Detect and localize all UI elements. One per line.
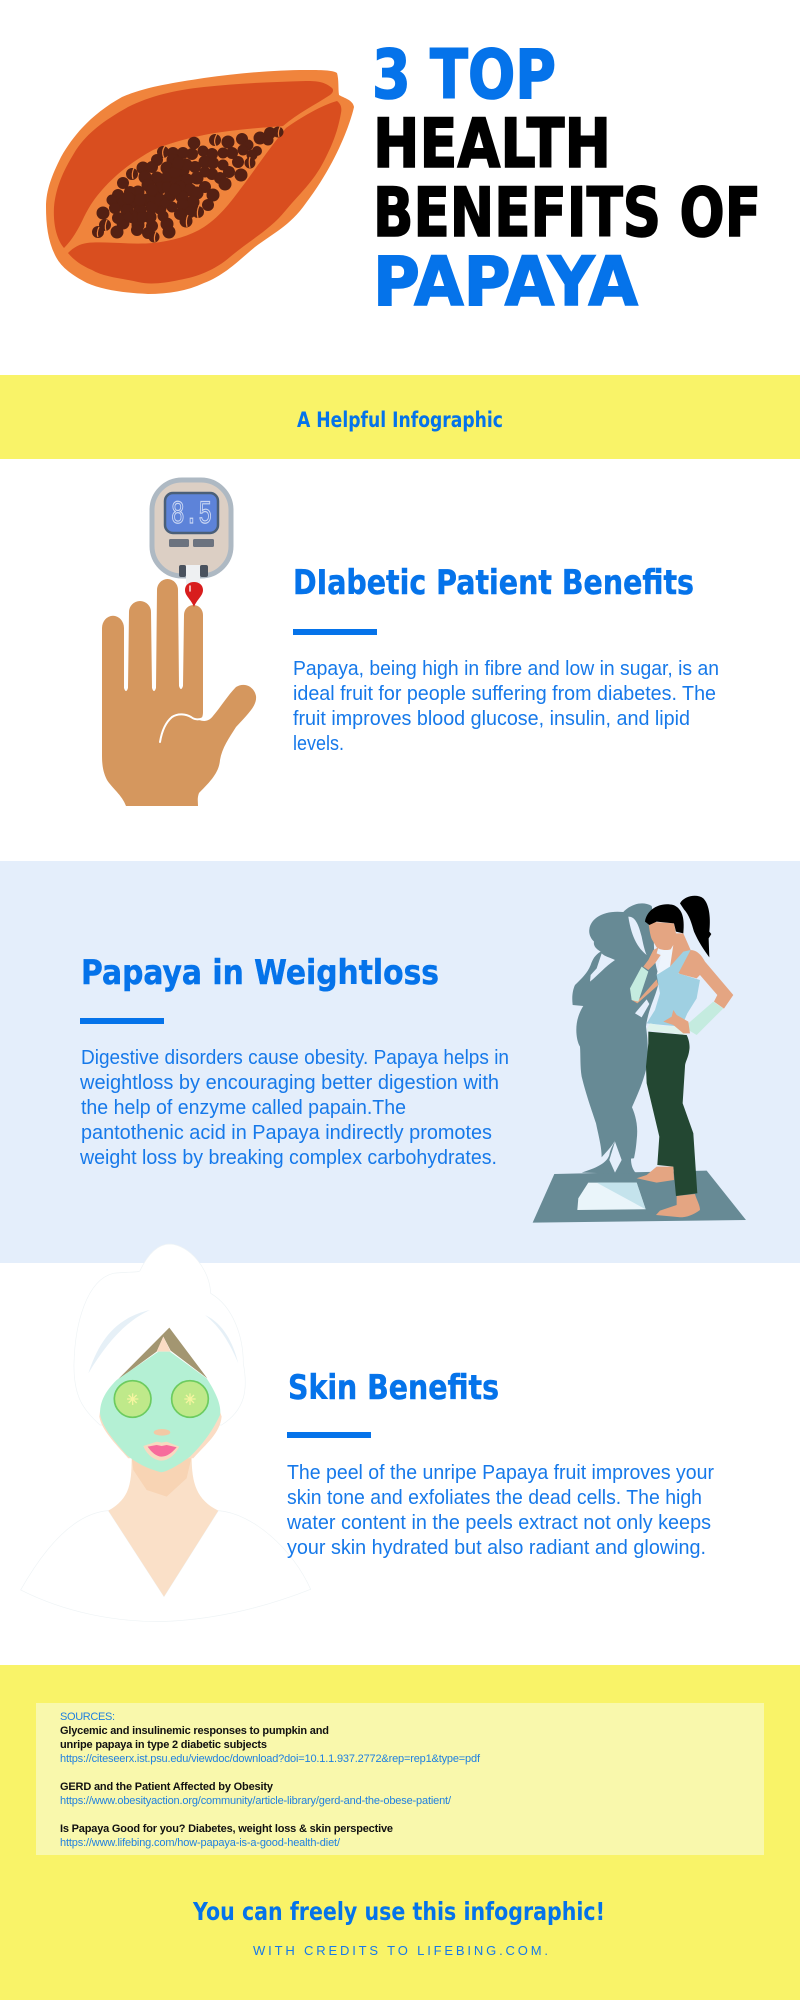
neck bbox=[108, 1457, 218, 1597]
text: skin body: skin tone and exfoliates the dead cells. The high bbox=[287, 1487, 702, 1509]
icon: glucose meter: 8.5 bbox=[171, 496, 212, 533]
panel: sources: Glycemic and insulinemic responses to pumpkin and bbox=[60, 1725, 329, 1737]
text: skin body: The peel of the unripe Papaya fruit improves your bbox=[287, 1462, 714, 1484]
title: PAPAYA bbox=[373, 243, 638, 322]
panel: skin benefits bbox=[21, 1244, 714, 1622]
papaya seeds bbox=[92, 127, 283, 242]
text: skin body bbox=[286, 1462, 714, 1559]
robe bbox=[21, 1511, 311, 1622]
panel: papaya in weightloss bbox=[0, 861, 800, 1263]
title: HEALTH bbox=[373, 105, 611, 184]
panel: sources: SOURCES: bbox=[60, 1711, 115, 1723]
icon: blood drop bbox=[185, 582, 203, 607]
accent bar bbox=[287, 1432, 371, 1438]
panel: sources: GERD and the Patient Affected by Obesity bbox=[60, 1781, 274, 1793]
text: weightloss body: weightloss by encouraging better digestion with bbox=[79, 1072, 499, 1094]
text: weightloss body: pantothenic acid in Papaya indirectly promotes bbox=[81, 1122, 492, 1144]
icon: papaya fruit bbox=[46, 70, 354, 294]
panel: sources: Is Papaya Good for you? Diabetes, weight loss & skin perspective bbox=[60, 1823, 393, 1835]
text: weightloss body bbox=[79, 1047, 509, 1169]
seed highlights bbox=[97, 127, 280, 242]
footer credit: WITH CREDITS TO LIFEBING.COM. bbox=[253, 1943, 548, 1958]
title: 3 TOP bbox=[372, 36, 556, 115]
subtitle: A Helpful Infographic bbox=[297, 408, 503, 432]
woman bbox=[630, 896, 733, 1217]
heading: papaya in weightloss: Papaya in Weightloss bbox=[81, 953, 439, 993]
footer heading: You can freely use this infographic! bbox=[192, 1897, 605, 1926]
heading: diabetic patient benefits: DIabetic Patient Benefits bbox=[293, 563, 694, 603]
heading: skin benefits: Skin Benefits bbox=[288, 1368, 499, 1408]
text: weightloss body: the help of enzyme called papain.The bbox=[81, 1097, 406, 1119]
panel: sources: https://www.obesityaction.org/community/article-library/gerd-and-the-obese-patient/ bbox=[60, 1795, 452, 1807]
panel: sources: https://www.lifebing.com/how-papaya-is-a-good-health-diet/ bbox=[60, 1837, 341, 1849]
towel bbox=[74, 1244, 245, 1425]
panel: sources bbox=[36, 1703, 764, 1855]
icon: glucose meter bbox=[152, 480, 231, 591]
text: weightloss body: Digestive disorders cause obesity. Papaya helps in bbox=[81, 1047, 509, 1069]
illustration: woman and shadow on scale bbox=[533, 896, 746, 1223]
panel: footer bbox=[0, 1665, 800, 2000]
text: diabetic body: levels. bbox=[293, 733, 344, 755]
text: diabetic body: fruit improves blood glucose, insulin, and lipid bbox=[293, 708, 690, 730]
illustration: woman with face mask bbox=[21, 1244, 311, 1622]
accent bar bbox=[80, 1018, 164, 1024]
scale bbox=[577, 1183, 646, 1210]
text: diabetic body: ideal fruit for people suffering from diabetes. The bbox=[293, 683, 716, 705]
panel: sources: unripe papaya in type 2 diabetic subjects bbox=[60, 1739, 267, 1751]
face bbox=[99, 1328, 222, 1472]
panel: sources: https://citeseerx.ist.psu.edu/viewdoc/download?doi=10.1.1.937.2772&rep=rep1&type=pdf bbox=[60, 1753, 481, 1765]
text: weightloss body: weight loss by breaking complex carbohydrates. bbox=[79, 1147, 497, 1169]
text: diabetic body bbox=[293, 658, 719, 755]
accent bar bbox=[293, 629, 377, 635]
subtitle band bbox=[0, 375, 800, 459]
icon: hand bbox=[102, 579, 256, 806]
panel: diabetic patient benefits bbox=[102, 480, 719, 806]
title bbox=[372, 36, 761, 322]
text: diabetic body: Papaya, being high in fibre and low in sugar, is an bbox=[293, 658, 719, 680]
text: skin body: water content in the peels extract not only keeps bbox=[286, 1512, 711, 1534]
text: skin body: your skin hydrated but also radiant and glowing. bbox=[287, 1537, 706, 1559]
